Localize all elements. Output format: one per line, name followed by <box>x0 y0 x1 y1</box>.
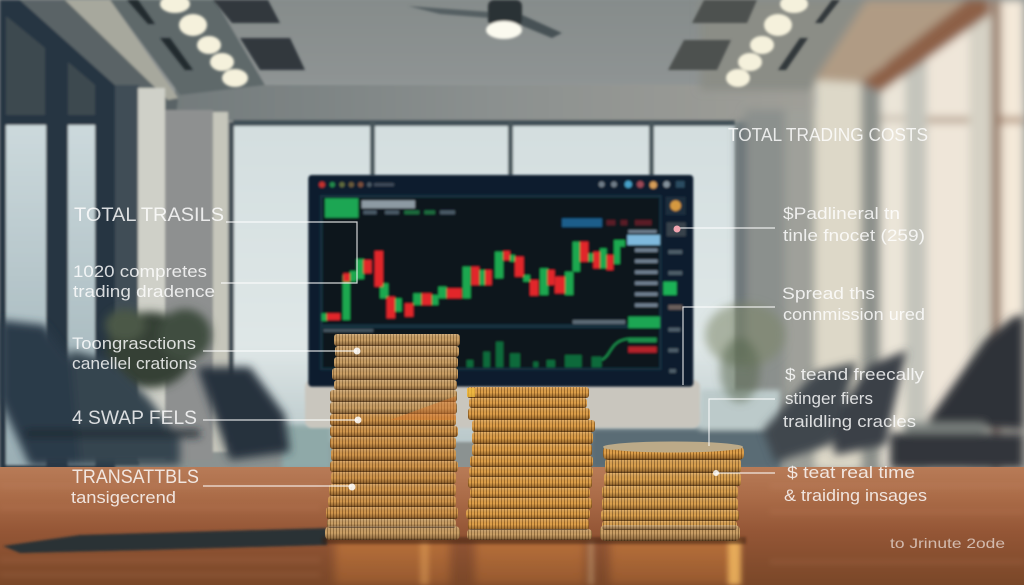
right label: padlineral: $Padlineral tn <box>783 204 900 223</box>
coin stack: short right <box>600 442 744 541</box>
left label: compretes: trading dradence <box>73 282 215 301</box>
candlestick chart <box>322 240 625 321</box>
right label: spread: connmission ured <box>783 305 925 324</box>
right label: padlineral <box>783 204 925 245</box>
sidebar widgets <box>663 197 686 373</box>
left label: transattbls <box>71 467 199 507</box>
order button <box>628 317 660 328</box>
left label: transattbls: TRANSATTBLS <box>72 467 199 488</box>
left label: transactions <box>72 334 197 373</box>
monitor frame <box>308 175 693 387</box>
right label: real time <box>784 463 927 505</box>
indicator line <box>602 339 657 360</box>
price list on chart <box>627 230 660 307</box>
right heading: total trading costs: TOTAL TRADING COSTS <box>728 125 928 145</box>
right label: real time: & traiding insages <box>784 486 927 505</box>
volume bars <box>467 342 602 367</box>
coin stack: tall left <box>325 334 460 540</box>
coin stack: middle <box>466 387 595 540</box>
chart panel <box>320 195 662 370</box>
left label: transactions: canellel crations <box>72 354 197 373</box>
footer note: to Jrinute 2ode <box>890 535 1005 551</box>
long shadow <box>3 528 327 553</box>
right wall and windows <box>700 0 1024 470</box>
window toolbar <box>319 181 685 189</box>
right label: spread: Spread ths <box>782 284 875 303</box>
left label: transattbls: tansigecrend <box>71 488 176 507</box>
left label: swap fees: 4 SWAP FELS <box>72 408 197 429</box>
trading monitor <box>308 175 693 387</box>
right label: spread <box>782 284 925 324</box>
green price badge <box>325 198 358 218</box>
heading on chart <box>362 200 415 208</box>
top coin <box>603 446 744 460</box>
right label: real time: $ teat real time <box>787 463 915 482</box>
coin reflections on table <box>335 540 735 585</box>
ceiling fan <box>408 0 562 39</box>
left label: compretes: 1020 compretes <box>73 262 207 281</box>
left label: compretes <box>73 262 215 301</box>
floor strip behind table <box>282 390 780 470</box>
right label: teand: traildling cracles <box>783 412 916 431</box>
right label: teand: $ teand freecally <box>785 365 925 384</box>
right label: teand: stinger fiers <box>785 389 873 408</box>
left label: total trasils: TOTAL TRASILS <box>74 205 224 226</box>
background plants <box>105 303 785 402</box>
wooden table <box>0 467 1024 585</box>
sell buy badges <box>562 218 602 227</box>
ceiling lights and vents <box>127 0 840 87</box>
right label: teand <box>783 365 925 431</box>
callout lines and markers <box>203 222 775 490</box>
left label: transactions: Toongrasctions <box>72 334 196 353</box>
monitor stand panel <box>305 380 700 428</box>
background chairs <box>0 315 1024 469</box>
right label: padlineral: tinle fnocet (259) <box>783 226 925 245</box>
